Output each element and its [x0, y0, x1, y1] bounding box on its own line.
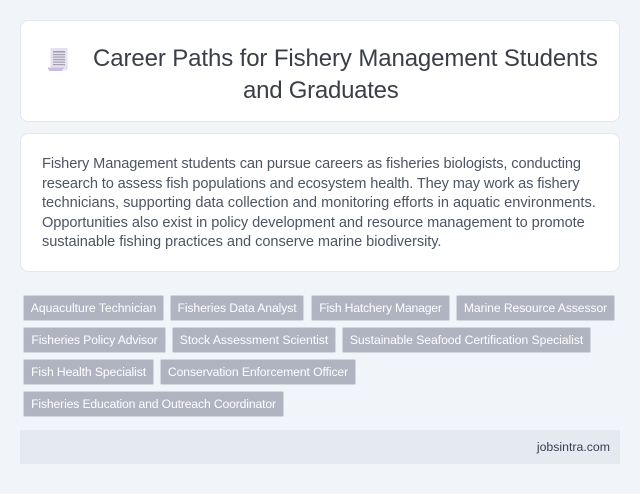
title: and Graduates: [243, 77, 399, 104]
tag: [23, 295, 164, 321]
tag: Fisheries Education and Outreach Coordinator: [31, 397, 276, 411]
tag: Marine Resource Assessor: [464, 301, 607, 315]
description text: [42, 156, 596, 250]
tag: [23, 359, 154, 385]
description text: Opportunities also exist in policy development and resource management to promote: [42, 215, 585, 231]
description text: sustainable fishing practices and conserve marine biodiversity.: [42, 234, 441, 250]
career tags: [23, 295, 615, 417]
footer source text: jobsintra.com: [537, 440, 610, 454]
tag: Fisheries Data Analyst: [177, 301, 297, 315]
tag: [170, 295, 304, 321]
tag: Sustainable Seafood Certification Specialist: [350, 333, 583, 347]
tag: [172, 327, 336, 353]
title: Career Paths for Fishery Management Students: [93, 45, 598, 72]
tag: [160, 359, 356, 385]
description text: Fishery Management students can pursue careers as fisheries biologists, conducting: [42, 156, 581, 172]
description text: technicians, supporting data collection and monitoring efforts in aquatic environments.: [42, 195, 596, 211]
tag: Fisheries Policy Advisor: [31, 333, 158, 347]
header panel: [20, 20, 620, 122]
icon: document scroll: [48, 48, 68, 71]
tag: [23, 327, 166, 353]
tag: Stock Assessment Scientist: [180, 333, 328, 347]
tag: [342, 327, 591, 353]
tag: Fish Hatchery Manager: [319, 301, 442, 315]
tag: [23, 391, 284, 417]
tag: Fish Health Specialist: [31, 365, 146, 379]
title: [93, 45, 598, 104]
tag: Conservation Enforcement Officer: [168, 365, 348, 379]
description panel: [20, 133, 620, 272]
description text: research to assess fish populations and ecosystem health. They may work as fishery: [42, 176, 579, 192]
tag: [456, 295, 615, 321]
tag: [311, 295, 450, 321]
footer bar: [20, 430, 620, 464]
tag: Aquaculture Technician: [31, 301, 156, 315]
